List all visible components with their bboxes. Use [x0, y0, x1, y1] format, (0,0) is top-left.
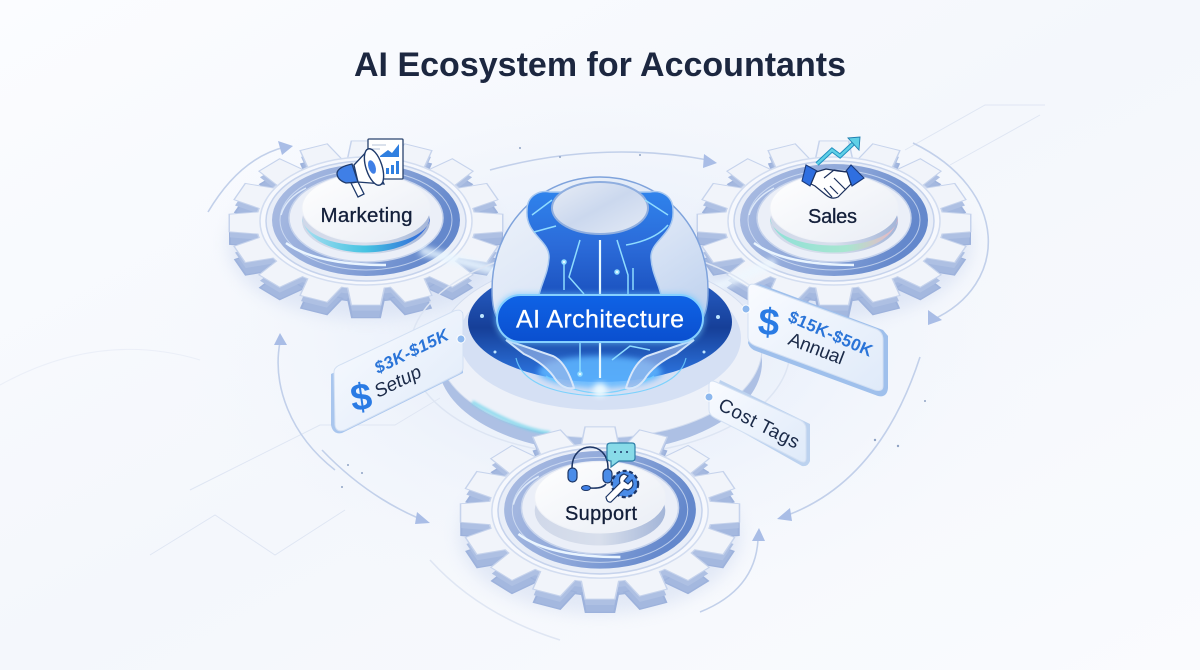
beam toward center: [420, 250, 500, 272]
card: annual cost: [748, 284, 888, 396]
arrow: marketing to top: [208, 141, 293, 212]
label: sales: Sales: [808, 206, 857, 228]
arrow: left arc upward: [274, 333, 335, 470]
gear: marketing: [228, 139, 504, 319]
dark bowl: [468, 262, 732, 382]
glass collar: [552, 182, 648, 234]
side glints: [480, 314, 720, 354]
faint circuit lines: [0, 105, 1045, 555]
arrow: sales to right: [913, 143, 988, 325]
connector node: cost tags: [705, 393, 713, 401]
scattered particles: [341, 147, 926, 488]
label: marketing: Marketing: [320, 204, 412, 227]
outer platform ring: [410, 245, 790, 455]
icon: wrench and gear: [606, 471, 638, 502]
connector node: setup: [457, 335, 465, 343]
lower rings: [516, 358, 686, 396]
circuit traces: [532, 200, 668, 378]
glass claw: right: [626, 340, 694, 388]
arc: bottom left under support: [430, 560, 560, 640]
center: AI sphere: [468, 177, 732, 397]
arrow: left arc to support: [322, 450, 430, 524]
label: support: Support: [565, 503, 637, 525]
gear: sales: [696, 137, 972, 319]
card: setup cost: [331, 310, 463, 433]
icon: headset: [568, 447, 612, 490]
bowl glow: [538, 356, 662, 388]
glass shell: [492, 177, 708, 322]
icon: megaphone with report: [337, 139, 403, 197]
amount: $3K-$15K: [371, 325, 453, 378]
inner blue core: [527, 192, 673, 300]
pill: AI Architecture: [495, 293, 705, 344]
dollar sign: $: [756, 301, 781, 345]
glow point: [593, 383, 607, 397]
card: cost tags: Cost Tags: [715, 395, 803, 453]
arrow: right arc to support: [777, 357, 920, 521]
dollar sign: $: [348, 376, 375, 420]
icon: handshake with arrow: [802, 137, 864, 198]
amount: $15K-$50K: [785, 307, 876, 361]
glass claw: left: [506, 340, 574, 388]
title: AI Ecosystem for Accountants: [354, 46, 846, 84]
central halo: [140, 40, 1060, 620]
icon: chat bubble: [607, 443, 635, 467]
beam toward center: [710, 262, 775, 290]
annual label: Annual: [785, 329, 847, 369]
arrow: top to sales: [490, 152, 717, 170]
pill: AI Architecture: AI Architecture: [516, 306, 684, 334]
setup label: Setup: [371, 362, 425, 402]
arrow: bottom right upward: [700, 528, 765, 612]
card: cost tags: [709, 380, 810, 466]
connector node: annual: [742, 305, 750, 313]
flow arrows: [208, 141, 988, 640]
gear: support: [459, 427, 741, 614]
central platform: [438, 258, 762, 452]
